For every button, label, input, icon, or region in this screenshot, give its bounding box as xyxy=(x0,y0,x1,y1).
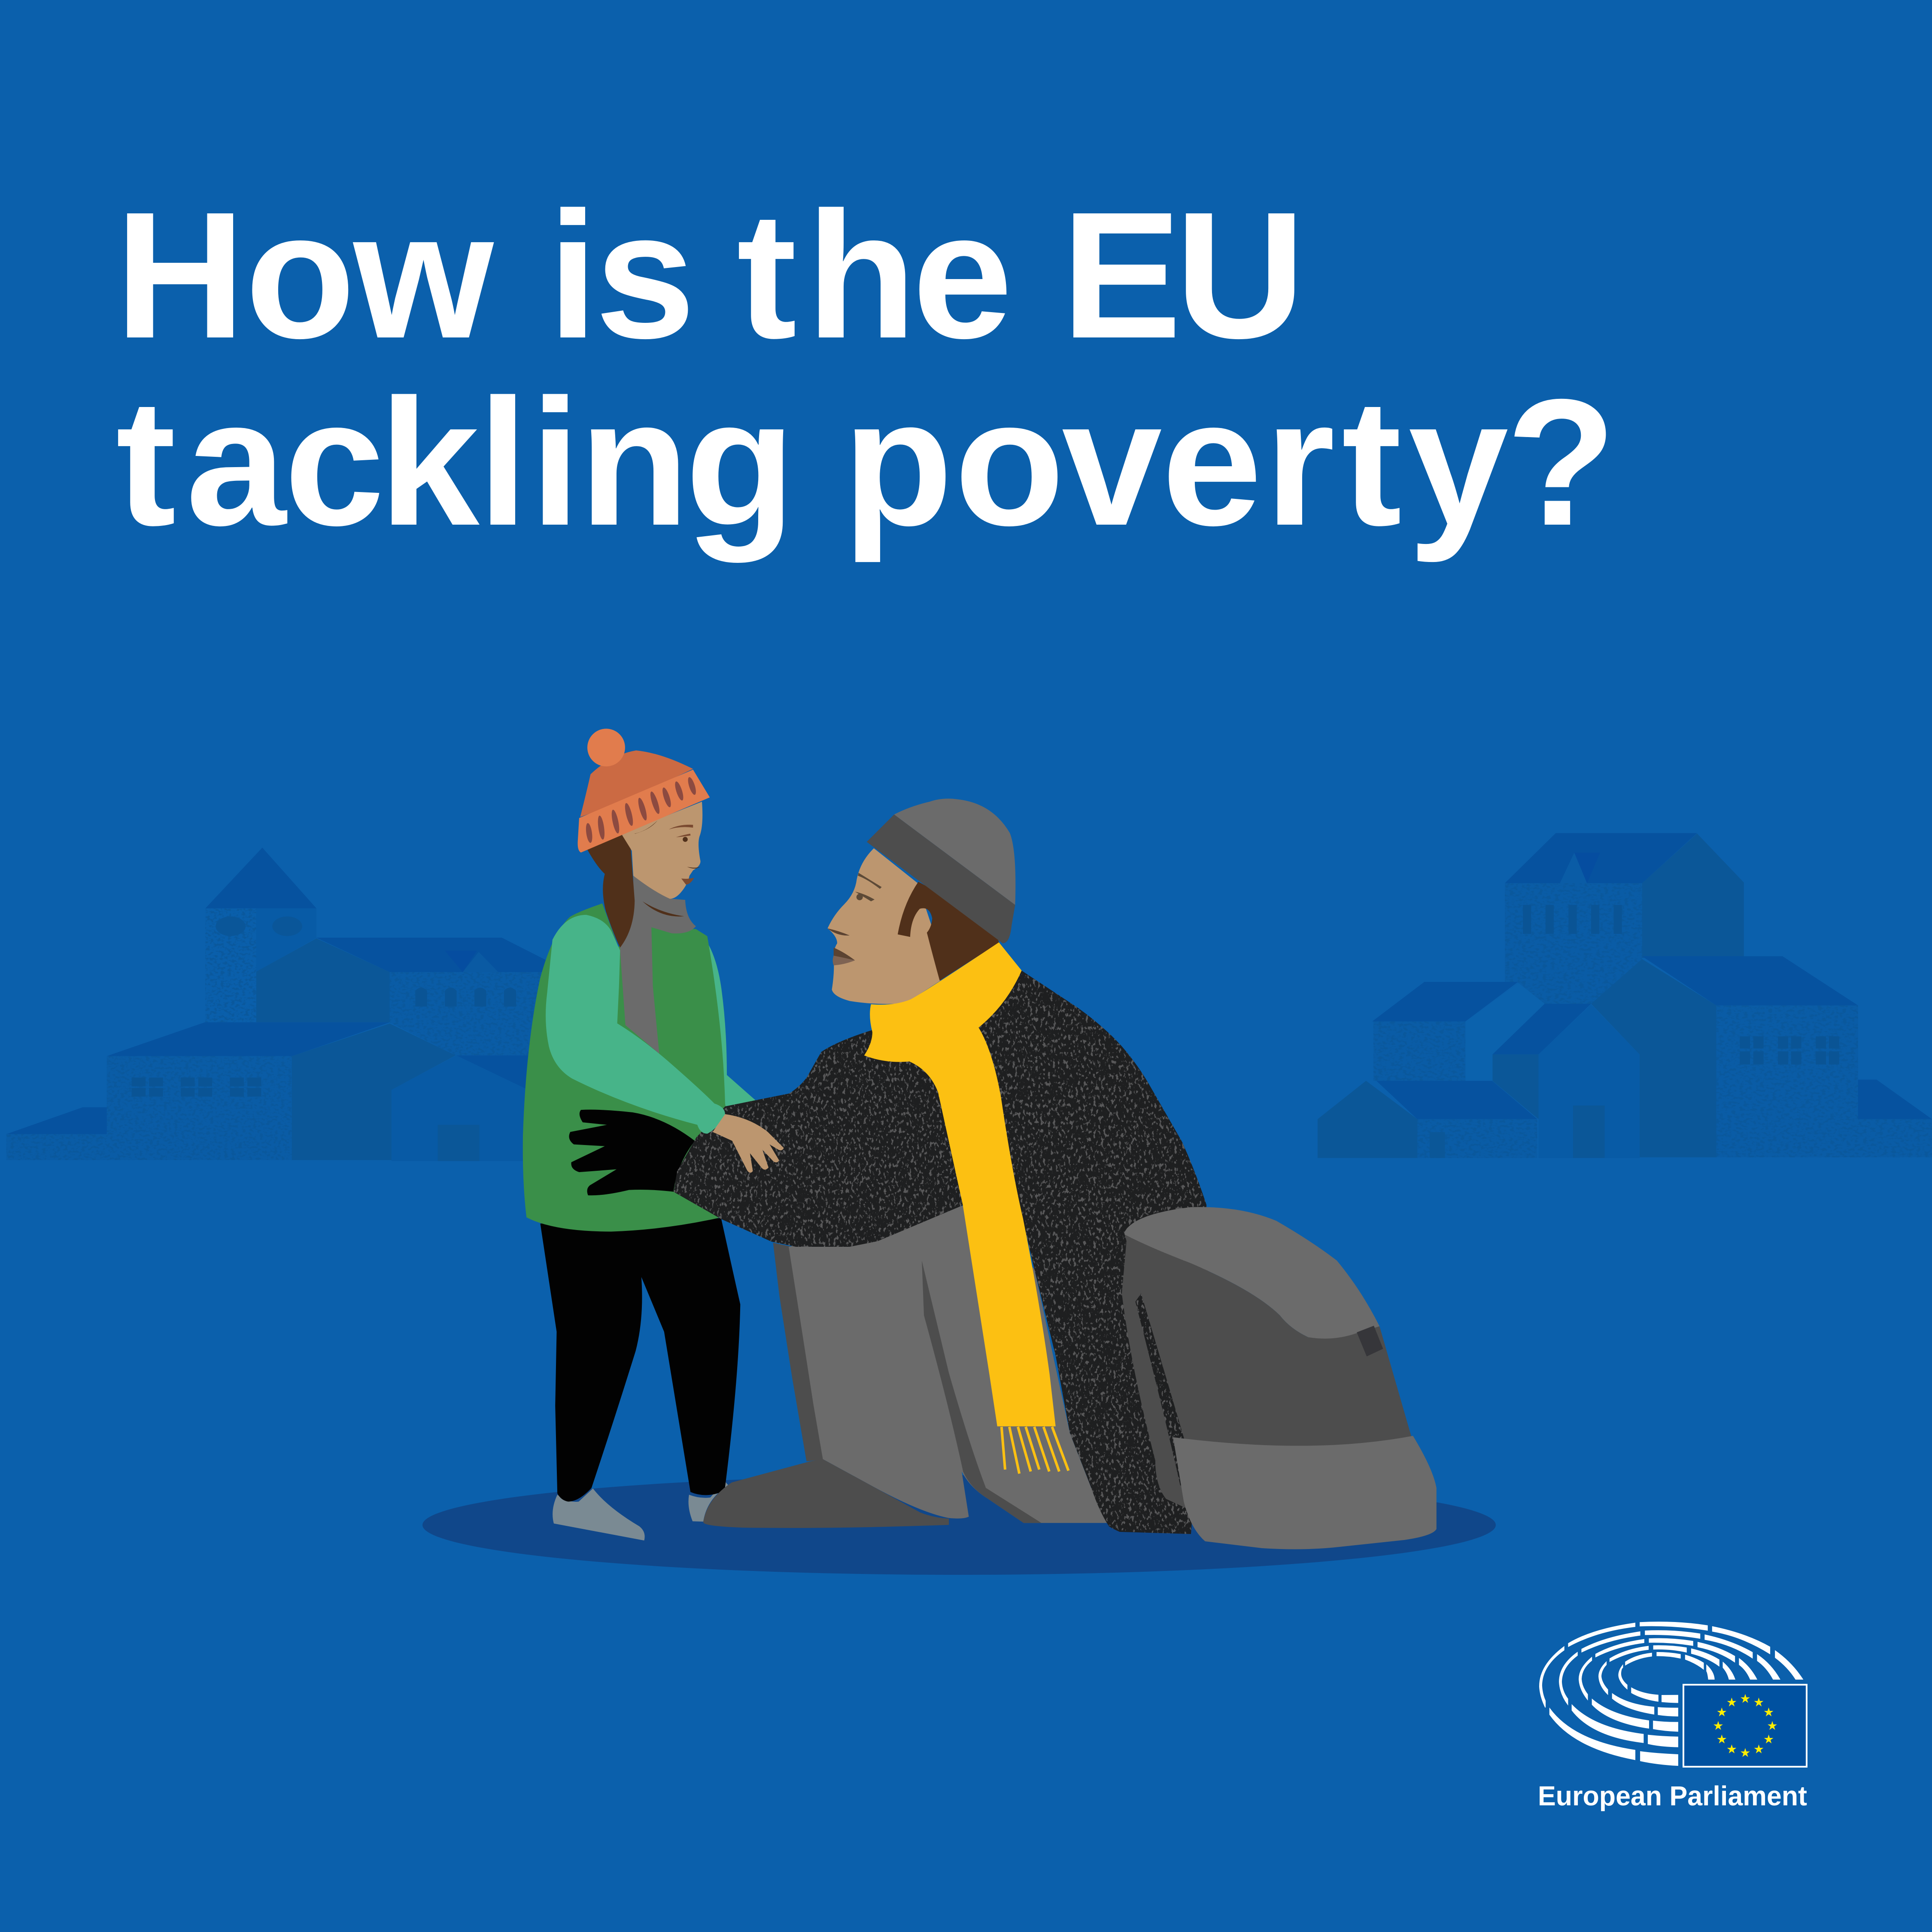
man yellow scarf xyxy=(864,942,1056,1426)
European Parliament logo xyxy=(1538,1622,1807,1811)
backpack body xyxy=(1125,1234,1415,1449)
backpack buckle xyxy=(1357,1326,1383,1356)
title line 1: How is the EU xyxy=(115,175,1305,376)
child torso and head xyxy=(523,729,757,1232)
title line 2: tackling poverty? xyxy=(116,362,1616,564)
child legs and shoes xyxy=(540,1218,740,1540)
background buildings: right xyxy=(1318,833,1932,1158)
man neck and face xyxy=(828,799,1015,1004)
EU flag xyxy=(1683,1685,1807,1767)
backpack xyxy=(1122,1207,1437,1549)
ground shadow ellipse xyxy=(422,1475,1496,1575)
man trousers and boot xyxy=(703,1206,1109,1528)
man beanie xyxy=(867,799,1015,943)
illustration: kneeling man xyxy=(569,799,1209,1534)
scarf fringe xyxy=(1002,1427,1069,1473)
child near sleeve and hand xyxy=(546,915,784,1173)
title xyxy=(115,175,1616,564)
backpack bottom pocket xyxy=(1173,1436,1437,1549)
hemicycle xyxy=(1540,1622,1803,1765)
man sweater xyxy=(674,971,1209,1534)
background buildings: left xyxy=(6,848,548,1161)
man glove xyxy=(569,1110,695,1195)
illustration: child xyxy=(523,729,757,1540)
logo wordmark: European Parliament xyxy=(1538,1780,1807,1811)
backpack flap xyxy=(1125,1207,1379,1339)
backpack strap xyxy=(1122,1237,1194,1512)
